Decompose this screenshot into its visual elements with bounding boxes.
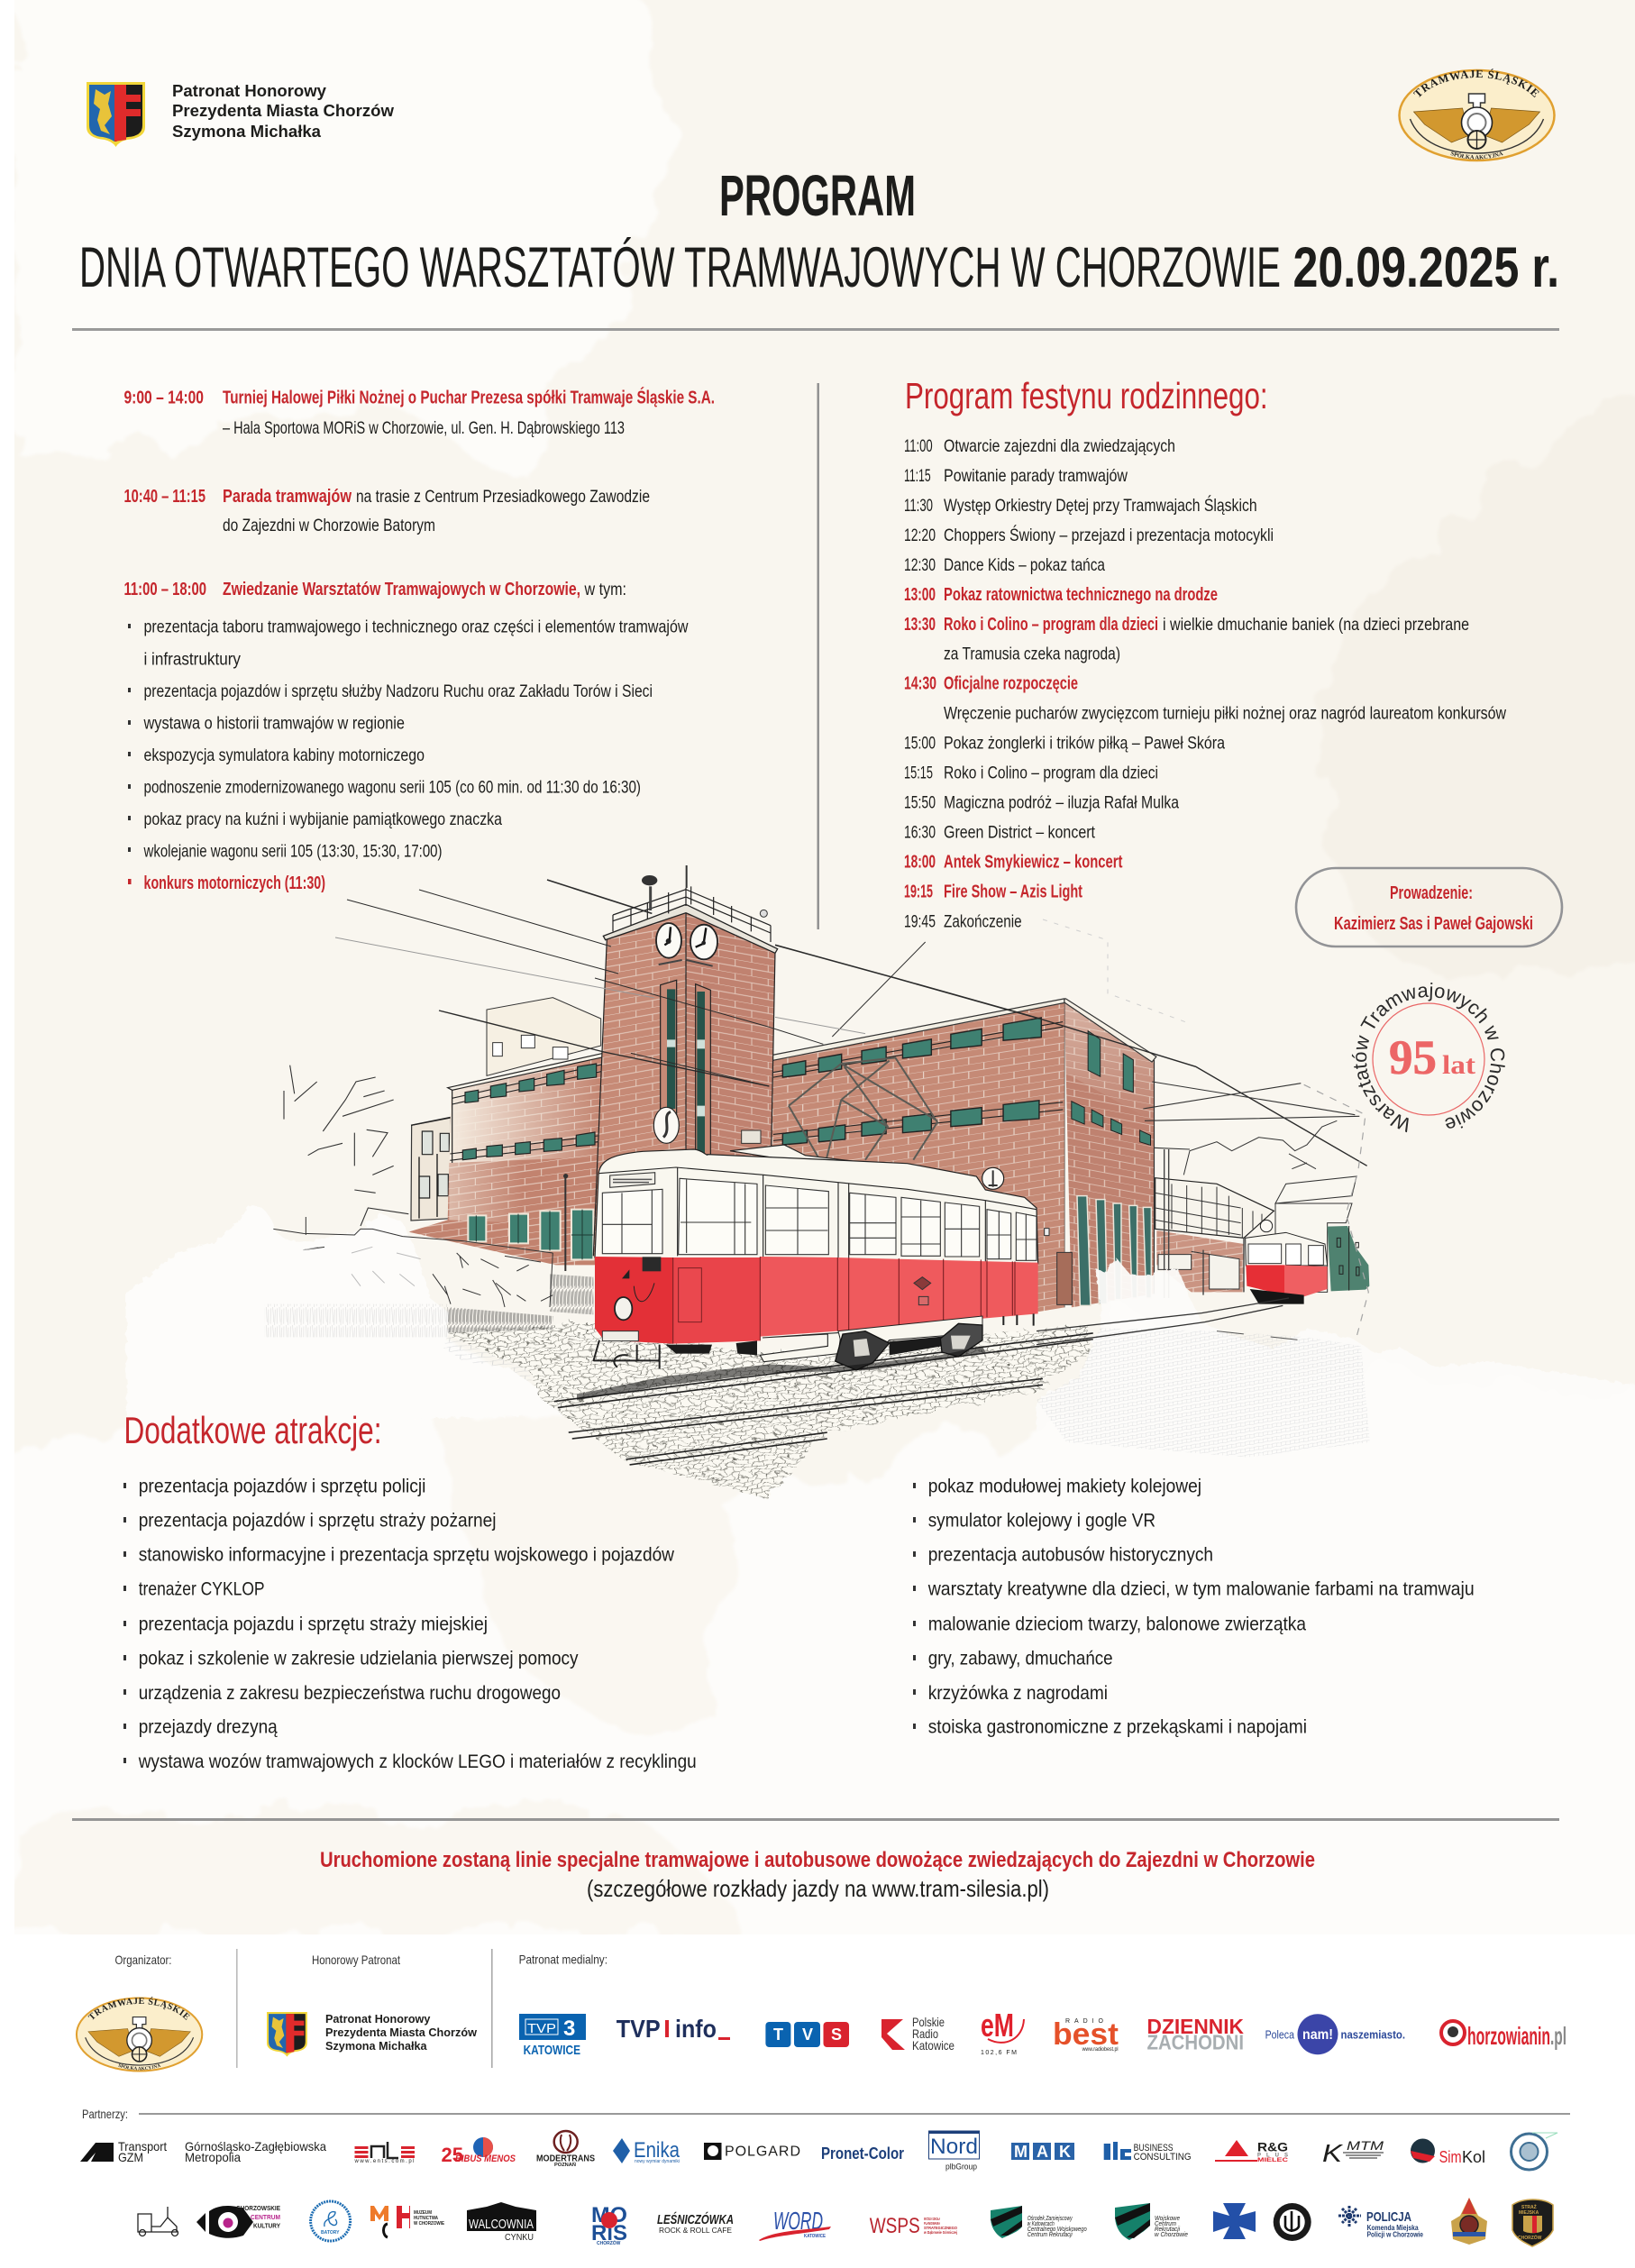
list: left column: prezentacja pojazdu i sprzętu straży miejskiej	[139, 1613, 488, 1634]
notice: special lines: Uruchomione zostaną linie specjalne tramwajowe i autobusowe dowożące zwiedzających do Zajezdni w Chorzowie	[320, 1848, 1315, 1872]
logo: SimKol: Kol	[1462, 2148, 1485, 2166]
panel: honorary patronage	[267, 1952, 478, 2057]
logo: Nord Partner: Nord	[930, 2135, 978, 2159]
tram undercarriage	[593, 1313, 1034, 1370]
logo: Pronet-Color: Pronet-Color	[821, 2145, 904, 2163]
logo: municipal guard: STRAŻ	[1521, 2204, 1537, 2210]
list: tour items: i infrastruktury	[144, 649, 241, 669]
logo: WORD Katowice	[759, 2207, 831, 2241]
logo: Poleca nam naszemiasto: Poleca	[1265, 2028, 1295, 2042]
notice: special lines: (szczegółowe rozkłady jazdy na www.tram-silesia.pl)	[587, 1875, 1049, 1902]
schedule rows: 14:30	[904, 673, 936, 694]
list: right column: symulator kolejowy i gogle VR	[928, 1509, 1155, 1531]
logo: TVP3 Katowice: TVP	[527, 2021, 556, 2036]
list: right column: gry, zabawy, dmuchańce	[928, 1648, 1113, 1669]
wires	[335, 880, 1367, 1166]
logo: Muzeum Hutnictwa: HUTNICTWA	[414, 2216, 438, 2221]
logo: GZM metropolis: Górnośląsko-Zagłębiowska	[185, 2139, 326, 2154]
list: left column: urządzenia z zakresu bezpieczeństwa ruchu drogowego	[139, 1682, 561, 1704]
logo: WCR Chorzów: Centrum	[1155, 2221, 1176, 2227]
logo: BC Business Consulting: CONSULTING	[1134, 2152, 1192, 2163]
logo: ENTS	[353, 2142, 415, 2164]
event: tram parade: do Zajezdni w Chorzowie Batorym	[223, 516, 435, 535]
panel: partners row 2	[138, 2198, 1553, 2246]
logo: WCR Chorzów: Rekrutacji	[1155, 2227, 1180, 2233]
logo: SimKol: Sim	[1439, 2148, 1462, 2166]
logo: Leśniczówka: LEŚNICZÓWKA	[657, 2211, 734, 2227]
list: tour items: wystawa o historii tramwajów w regionie	[143, 714, 405, 734]
list: left column: pokaz i szkolenie w zakresie udzielania pierwszej pomocy	[139, 1648, 579, 1669]
logo: WCR Katowice: Ośrodek Zamiejscowy	[1028, 2216, 1073, 2222]
logo: railway emblem	[1511, 2133, 1557, 2170]
logo: Polskie Radio Katowice: Polskie	[912, 2015, 945, 2029]
logo: TVP3 Katowice	[519, 2014, 586, 2058]
logo: Tramwaje Śląskie small: TRAMWAJE ŚLĄSKIE	[88, 1997, 190, 2020]
logo: WCR Chorzów	[1115, 2203, 1188, 2240]
far tram body	[1246, 1220, 1328, 1304]
list: tour items: konkurs motorniczych (11:30)	[144, 873, 325, 893]
logo: TVS	[765, 2022, 849, 2047]
badge: 95 years: Warsztatów Tramwajowych w Chorzowie	[1352, 983, 1505, 1132]
panel: media patrons	[519, 1952, 1566, 2058]
list: right column: prezentacja autobusów historycznych	[928, 1543, 1213, 1565]
logo: GZM metropolis	[185, 2139, 326, 2164]
tram sign	[653, 1107, 761, 1143]
panel: family festival programme	[904, 375, 1507, 931]
trees left	[284, 1065, 408, 1226]
tram emblem	[914, 1277, 931, 1290]
logo: Nord Partner: plbGroup	[945, 2163, 977, 2172]
logo: Chorzowianin.pl: .pl	[1550, 2022, 1566, 2050]
pantograph	[789, 1057, 937, 1166]
left wing and annex	[408, 998, 604, 1271]
event: tournament	[124, 386, 715, 438]
logo: Dziennik Zachodni: ZACHODNI	[1146, 2031, 1244, 2054]
logo: R&G Plus: MIELEC	[1257, 2158, 1289, 2163]
logo: Polskie Radio Katowice	[881, 2015, 955, 2053]
trees right	[1183, 1120, 1337, 1175]
logo: Leśniczówka: ROCK & ROLL CAFE	[659, 2227, 732, 2235]
tram shadow	[577, 1346, 985, 1400]
patronage text: Prezydenta Miasta Chorzów	[172, 102, 395, 120]
schedule rows: i wielkie dmuchanie baniek (na dzieci przebrane	[1163, 615, 1469, 635]
logo: WORD Katowice: WORD	[773, 2207, 823, 2235]
clock tower	[593, 865, 778, 1256]
list: tour items: prezentacja pojazdów i sprzętu służby Nadzoru Ruchu oraz Zakładu Torów i Sieci	[144, 681, 653, 701]
tram windows	[602, 1173, 1037, 1260]
event: tram parade: na trasie z Centrum Przesiadkowego Zawodzie	[356, 487, 650, 507]
logo: Leśniczówka	[657, 2211, 734, 2235]
logo: MAK: M	[1014, 2143, 1028, 2161]
logo: Chorzowskie Centrum Kultury	[196, 2204, 280, 2238]
back hall, far tram and gate	[1037, 1082, 1635, 1532]
schedule rows: za Tramusia czeka nagroda)	[944, 645, 1120, 664]
logo: Nord Partner	[928, 2131, 979, 2172]
event: workshop tour: Zwiedzanie Warsztatów Tramwajowych w Chorzowie,	[223, 579, 580, 599]
list: tour items: prezentacja taboru tramwajowego i technicznego oraz części i elementów tramwajów	[144, 617, 689, 637]
logo: Enika	[613, 2138, 680, 2164]
logo: TVP3 Katowice: KATOWICE	[524, 2043, 580, 2058]
heading: Dodatkowe atrakcje:	[124, 1409, 382, 1451]
logo: MORiS: RiS	[591, 2221, 627, 2245]
logo: R&G Plus	[1215, 2140, 1289, 2163]
list: right column: malowanie dzieciom twarzy, balonowe zwierzątka	[928, 1613, 1306, 1634]
right wing	[768, 999, 1156, 1312]
list: right column: pokaz modułowej makiety kolejowej	[928, 1476, 1201, 1497]
logo: WCR Katowice	[991, 2206, 1087, 2238]
logo: TVP Info: TVP	[617, 2015, 661, 2043]
logo: Batory: BATORY	[321, 2230, 340, 2236]
logo: Poleca nam naszemiasto: nam!	[1302, 2027, 1333, 2043]
logo: Tramwaje Śląskie: TRAMWAJE ŚLĄSKIE	[1413, 69, 1539, 97]
schedule rows: 15:15	[904, 764, 933, 783]
schedule rows: 11:30	[904, 496, 933, 516]
list: left column: trenażer CYKLOP	[139, 1578, 265, 1600]
logo: BC Business Consulting	[1104, 2142, 1192, 2163]
panel: honorary patronage: Honorowy Patronat	[312, 1952, 400, 1967]
logo: Walcownia Cynku: CYNKU	[505, 2233, 534, 2243]
callout: hosts: Kazimierz Sas i Paweł Gajowski	[1334, 913, 1533, 934]
tram roof detail	[730, 1145, 982, 1188]
logo: MORiS: MO	[591, 2203, 627, 2227]
logo: Radio Best: www.radiobest.pl	[1082, 2047, 1119, 2053]
schedule rows: 15:50	[904, 793, 936, 813]
schedule rows: Wręczenie pucharów zwycięzcom turnieju piłki nożnej oraz nagród laureatom konkursów	[944, 704, 1507, 724]
logo: Chorzowskie Centrum Kultury: CENTRUM	[251, 2213, 280, 2221]
logo: fire service	[1451, 2198, 1487, 2245]
logo: PW circle	[1274, 2203, 1311, 2241]
panel: honorary patronage: Prezydenta Miasta Chorzów	[325, 2026, 478, 2039]
logo: Bibus Menos: 25	[442, 2144, 463, 2166]
schedule rows: Występ Orkiestry Dętej przy Tramwajach Śląskich	[944, 494, 1257, 516]
logo: Chorzowianin.pl	[1441, 2021, 1566, 2050]
event: tournament: Turniej Halowej Piłki Nożnej o Puchar Prezesa spółki Tramwaje Śląskie S.A.	[223, 386, 715, 407]
street cobbles	[296, 1321, 1093, 1499]
event: tram parade	[124, 486, 650, 535]
list: right column: warsztaty kreatywne dla dzieci, w tym malowanie farbami na tramwaju	[927, 1578, 1475, 1600]
badge: 95 years: 95	[1389, 1030, 1437, 1084]
panel: honorary patronage: Patronat Honorowy	[325, 2012, 431, 2026]
event: workshop tour: 11:00 – 18:00	[124, 579, 206, 599]
logo: Modertrans: MODERTRANS	[536, 2154, 595, 2164]
logo: Transport GZM	[80, 2139, 167, 2164]
logo: KMTM: K	[1322, 2139, 1344, 2167]
tram upper body	[595, 1149, 1038, 1264]
logo: KMTM	[1322, 2138, 1384, 2167]
notice: special lines	[320, 1848, 1315, 1902]
logo: SimKol	[1411, 2138, 1485, 2166]
logo: WSPS: WSPS	[870, 2214, 920, 2238]
schedule rows	[904, 436, 1507, 931]
tower slit windows	[661, 980, 710, 1244]
logo: Enika: nowy wymiar dynamiki	[635, 2159, 680, 2164]
schedule rows: 19:45	[904, 911, 936, 931]
logo: Bibus Menos: BIBUS MENOS	[455, 2154, 516, 2164]
railing	[613, 886, 771, 942]
list: right column	[913, 1476, 1475, 1738]
title	[79, 163, 1559, 299]
logo: Radio eM: eM	[981, 2007, 1014, 2044]
clock faces	[656, 923, 717, 966]
logo: municipal guard: CHORZÓW	[1518, 2234, 1542, 2241]
logo: Transport GZM: Transport	[118, 2139, 167, 2154]
logo: R&G Plus: PLUS	[1257, 2153, 1288, 2158]
schedule rows: 13:30	[904, 614, 936, 635]
list: left column: prezentacja pojazdów i sprzętu policji	[139, 1476, 425, 1497]
small tram sign	[982, 1167, 1004, 1189]
list: left column: stanowisko informacyjne i prezentacja sprzętu wojskowego i pojazdów	[139, 1543, 674, 1565]
logo: municipal guard	[1512, 2199, 1553, 2246]
logo: Tramwaje Śląskie small	[76, 1997, 204, 2071]
sketch edge	[1043, 919, 1186, 1022]
callout: hosts: Prowadzenie:	[1390, 883, 1473, 903]
logo: Dziennik Zachodni	[1146, 2015, 1244, 2054]
logo: WCR Katowice: Centralnego Wojskowego	[1028, 2227, 1087, 2233]
logo: Tramwaje Śląskie: SPÓŁKA AKCYJNA	[1451, 151, 1503, 160]
logo: TVP3 Katowice: 3	[563, 2017, 575, 2041]
logo: Polgard: POLGARD	[725, 2145, 800, 2160]
event: workshop tour: w tym:	[584, 580, 626, 599]
schedule rows: Choppers Świony – przejazd i prezentacja motocykli	[944, 524, 1274, 545]
title: PROGRAM	[719, 163, 916, 228]
logo: WCR Katowice: Centrum Rekrutacji	[1028, 2232, 1073, 2238]
logo: ENTS: www.ents.com.pl	[353, 2159, 415, 2164]
main tram	[577, 1145, 1038, 1400]
logo: tram drawing	[138, 2207, 178, 2236]
logo: TVS: S	[831, 2026, 842, 2044]
logo: Modertrans: POZNAŃ	[554, 2161, 576, 2168]
schedule rows: 15:00	[904, 734, 936, 754]
list: tour items: pokaz pracy na kuźni i wybijanie pamiątkowego znaczka	[144, 809, 502, 829]
event: tournament: 9:00 – 14:00	[124, 388, 204, 407]
tall windows	[1045, 1196, 1151, 1305]
logo: Radio Best: RADIO	[1065, 2018, 1104, 2025]
event: tram parade: 10:40 – 11:15	[124, 486, 206, 507]
schedule rows: Roko i Colino – program dla dzieci	[944, 614, 1158, 635]
logo: Polskie Radio Katowice: Katowice	[912, 2038, 955, 2053]
logo: Batory	[311, 2201, 351, 2241]
schedule rows: Oficjalne rozpoczęcie	[944, 673, 1078, 694]
title: 20.09.2025 r.	[1292, 236, 1559, 299]
panel: organiser	[76, 1952, 204, 2071]
logo: GZM metropolis: Metropolia	[185, 2150, 241, 2164]
panel: honorary patronage: Szymona Michałka	[325, 2039, 427, 2053]
tram headlight	[615, 1297, 632, 1320]
logo: Muzeum Hutnictwa	[370, 2206, 445, 2237]
schedule rows: Powitanie parady tramwajów	[944, 466, 1128, 486]
schedule rows: Green District – koncert	[944, 822, 1095, 842]
schedule rows: 16:30	[904, 822, 936, 842]
panel: organiser: Organizator:	[115, 1952, 171, 1967]
logo: Muzeum Hutnictwa: MUZEUM	[414, 2210, 432, 2216]
logo: Polskie Radio Katowice: Radio	[912, 2026, 938, 2041]
event: tournament: – Hala Sportowa MORiS w Chorzowie, ul. Gen. H. Dąbrowskiego 113	[223, 418, 625, 438]
logo: Transport GZM: GZM	[118, 2150, 143, 2164]
schedule rows: Fire Show – Azis Light	[944, 881, 1082, 901]
logo: Policja: Policji w Chorzowie	[1367, 2231, 1423, 2239]
schedule rows: 13:00	[904, 584, 936, 605]
logo: WSPS: PLANOWANIA	[924, 2221, 940, 2226]
logo: MAK	[1011, 2143, 1074, 2161]
logo: TVP Info: info	[675, 2015, 717, 2043]
patronage text: Szymona Michałka	[172, 123, 322, 141]
logo: Chorzowianin.pl: horzowianin	[1467, 2022, 1550, 2050]
schedule rows: Pokaz ratownictwa technicznego na drodze	[944, 584, 1218, 605]
list: left column: prezentacja pojazdów i sprzętu straży pożarnej	[139, 1509, 496, 1531]
list: left column: wystawa wozów tramwajowych z klocków LEGO i materiałów z recyklingu	[138, 1751, 697, 1772]
logo: WSPS: w Dąbrowie Górniczej	[923, 2230, 957, 2235]
patronage text	[172, 82, 395, 141]
logo: Tramwaje Śląskie	[1398, 69, 1556, 162]
logo: Radio Best: best	[1053, 2017, 1119, 2052]
badge: 95 years: lat	[1442, 1050, 1475, 1080]
hedge, white wash and trees	[126, 1065, 593, 1427]
logo: Radio eM: 102,6 FM	[981, 2050, 1017, 2056]
logo: WORD Katowice: KATOWICE	[804, 2234, 827, 2239]
logo: Dziennik Zachodni: DZIENNIK	[1146, 2015, 1244, 2038]
logo: Poleca nam naszemiasto: naszemiasto.	[1341, 2028, 1405, 2042]
tram red panels	[595, 1257, 1038, 1344]
logo: R&G Plus: R&G	[1257, 2140, 1288, 2154]
panel: additional attractions	[123, 1409, 1475, 1772]
logo: Walcownia Cynku: WALCOWNIA	[469, 2217, 534, 2232]
list: tour items: podnoszenie zmodernizowanego wagonu serii 105 (co 60 min. od 11:30 do 16:30)	[144, 777, 641, 797]
logo: TVP Info	[617, 2015, 730, 2043]
schedule rows: Zakończenie	[944, 911, 1022, 931]
logo: TVS: T	[773, 2026, 783, 2044]
logo: MORiS	[591, 2203, 627, 2246]
white wash over pavement	[1037, 1257, 1635, 1532]
schedule rows: 19:15	[904, 881, 933, 901]
logo: municipal guard: MIEJSKA	[1519, 2210, 1539, 2216]
list: tour items: wkolejanie wagonu serii 105 (13:30, 15:30, 17:00)	[143, 841, 442, 861]
crest: city of Chorzów	[87, 82, 145, 147]
logo: Modertrans	[536, 2131, 595, 2168]
schedule rows: 12:20	[904, 526, 936, 545]
panel: partners row 1	[80, 2131, 1557, 2172]
logo: MORiS: CHORZÓW	[597, 2239, 621, 2246]
schedule rows: Dance Kids – pokaz tańca	[944, 555, 1105, 575]
list: left column: przejazdy drezyną	[139, 1716, 278, 1738]
logo: WCR Chorzów: w Chorzowie	[1155, 2232, 1188, 2238]
logo: Poleca nam naszemiasto	[1265, 2014, 1405, 2054]
crest small	[267, 2012, 307, 2057]
logo: TVS: V	[802, 2026, 813, 2044]
event: tram parade: Parada tramwajów	[223, 486, 352, 507]
panel: media patrons: Patronat medialny:	[519, 1952, 607, 1967]
heading: partners with rule: Partnerzy:	[82, 2107, 128, 2121]
schedule rows: 12:30	[904, 555, 936, 575]
logo: blue cross	[1213, 2203, 1256, 2239]
schedule rows: Pokaz żonglerki i trików piłką – Paweł Skóra	[944, 734, 1225, 754]
schedule rows: 11:15	[904, 466, 931, 486]
schedule rows: Magiczna podróż – iluzja Rafał Mulka	[944, 793, 1179, 813]
logo: WCR Katowice: w Katowicach	[1028, 2221, 1055, 2227]
list: left column	[123, 1476, 697, 1772]
list: right column: stoiska gastronomiczne z przekąskami i napojami	[928, 1716, 1307, 1738]
logo: Muzeum Hutnictwa: W CHORZOWIE	[414, 2221, 445, 2227]
logo: Chorzowskie Centrum Kultury: KULTURY	[253, 2222, 280, 2230]
logo: Walcownia Cynku	[467, 2202, 536, 2243]
logo: KMTM: MTM	[1347, 2138, 1384, 2153]
callout: hosts	[1296, 868, 1562, 947]
logo: WSPS: STRATEGICZNEGO	[924, 2226, 957, 2230]
list: tour items	[128, 617, 689, 893]
logo: Policja	[1338, 2206, 1423, 2239]
list: right column: krzyżówka z nagrodami	[928, 1682, 1108, 1704]
schedule rows: Roko i Colino – program dla dzieci	[944, 764, 1158, 783]
heading: Program festynu rodzinnego:	[905, 375, 1268, 416]
schedule rows: 11:00	[904, 436, 933, 456]
logo: MAK: A	[1037, 2143, 1048, 2161]
logo: Bibus Menos	[442, 2137, 516, 2166]
illustration: tram depot	[126, 865, 1635, 1532]
logo: Chorzowskie Centrum Kultury: CHORZOWSKIE	[236, 2204, 280, 2212]
panel: left timetable	[124, 386, 715, 893]
list: tour items: ekspozycja symulatora kabiny motorniczego	[144, 745, 425, 765]
logo: WCR Chorzów: Wojskowe	[1155, 2216, 1180, 2222]
logo: BC Business Consulting: BUSINESS	[1134, 2143, 1174, 2154]
schedule rows: Otwarcie zajezdni dla zwiedzających	[944, 436, 1175, 456]
logo: Enika: Enika	[634, 2138, 680, 2163]
schedule rows: Antek Smykiewicz – koncert	[944, 851, 1123, 872]
logo: WSPS: WYŻSZA SZKOŁA	[924, 2216, 940, 2221]
logo: Policja: POLICJA	[1366, 2209, 1411, 2225]
schedule rows: 18:00	[904, 851, 936, 872]
logo: MAK: K	[1059, 2143, 1071, 2161]
logo: Policja: Komenda Miejska	[1367, 2224, 1419, 2232]
patronage text: Patronat Honorowy	[172, 82, 326, 100]
logo: Tramwaje Śląskie small: SPÓŁKA AKCYJNA	[118, 2064, 160, 2070]
